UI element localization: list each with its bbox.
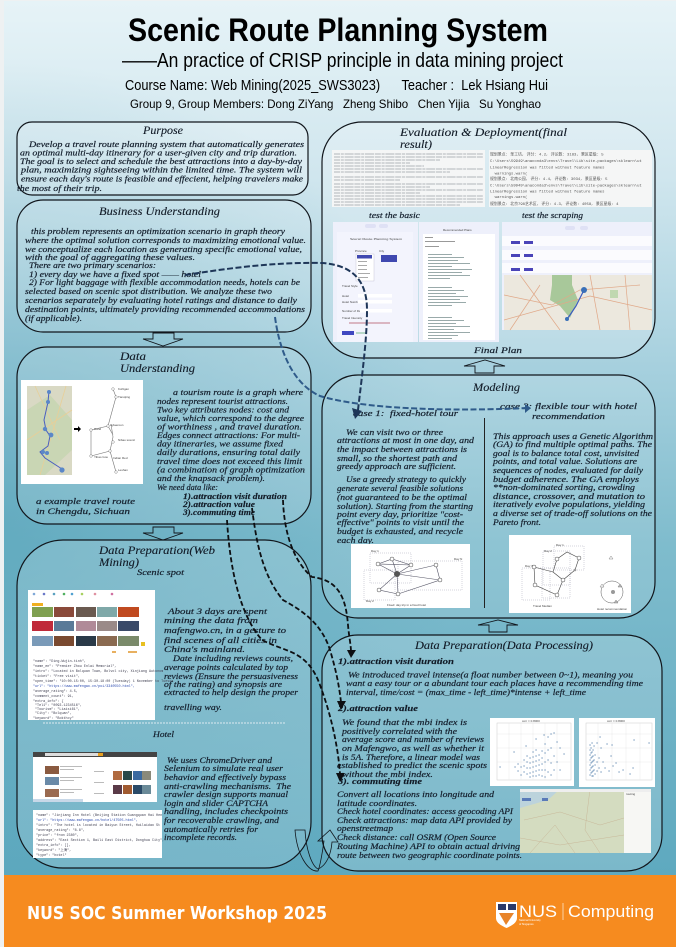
figure: scenic spot site and json: "average_rating": 4.5, <box>33 689 78 694</box>
screenshot: planner form: City <box>379 249 385 253</box>
text block: scenic spot body: Date including reviews counts, <box>172 653 293 663</box>
heading: evaluation and deployment: result) <box>400 139 432 151</box>
arrow: dashed link commuting time <box>227 520 345 782</box>
figure: scenic spot site and json: "name_en": "Premier Zhou Enlai Memorial", <box>33 664 116 669</box>
panel: modeling <box>322 375 655 618</box>
text block: scenic spot body: reviews (Ensure the persuasiveness <box>164 671 299 681</box>
text block: case 2 body: **non-dominated sorting, crowding <box>493 482 636 492</box>
text block: scenic spot body: mafengwo.cn, in a gesture to <box>164 625 287 635</box>
heading: data preparation web mining: Mining) <box>98 557 139 569</box>
subheading: attraction value: 2).attraction value <box>337 703 418 713</box>
subheading: case 2: recommendation <box>532 411 606 421</box>
text block: data understanding body: We need data like: <box>157 482 218 492</box>
figure: hotel json: "extra_info": [], <box>36 843 71 848</box>
figure: hotel json: "name": "Jinjiang Inn Hotel (Beijing Station Guangquan Hai Hen <box>36 813 162 818</box>
text block: case 1 body: We can visit two or three <box>346 427 443 437</box>
arrow: dashed link attraction value <box>252 508 346 710</box>
arrow: modeling to evaluation <box>464 360 505 373</box>
text block: case 2 body: goal is to balance total cost, unvisited <box>493 448 640 458</box>
text block: commuting time body: route between two geographic coordinate points. <box>337 850 522 860</box>
panel: data preparation data processing <box>322 635 662 871</box>
figure: route map and graph: Kohlgan <box>118 387 129 391</box>
text block: business understanding body: where the optimal solution corresponds to maximizing emotional value. <box>25 235 306 245</box>
text block: hotel body: incomplete records. <box>164 832 237 842</box>
figure: flexible tour graph: Day 2 <box>544 549 552 553</box>
text block: hotel body: Selenium to simulate real user <box>164 763 284 773</box>
text block: case 1 body <box>336 427 475 545</box>
text block: commuting time body: latitude coordinates. <box>337 798 417 808</box>
text block: business understanding body: we conceptualize each location as generating specific emotional value, <box>25 244 302 254</box>
figure: hotel json <box>33 810 164 858</box>
text block: commuting time body: openstreetmap <box>337 823 394 833</box>
text block: scenic spot body: of the rating) and synopsis are <box>164 679 282 689</box>
subheading: commuting time: 3). commuting time <box>337 776 422 786</box>
label: final plan: Final Plan <box>473 345 523 355</box>
arrow: dashed link visit duration <box>283 500 356 658</box>
footer band <box>4 875 676 947</box>
text block: scenic spot body: average points calculated by top <box>164 662 289 672</box>
caption: example route: in Chengdu, Sichuan <box>36 506 131 516</box>
figure: scenic spot site and json: "City": "Bolquan", <box>35 711 72 716</box>
figure: route map and graph: Tianqiing <box>118 395 130 399</box>
figure: route map and graph: Leshan <box>118 468 128 472</box>
caption: test the basic: test the basic <box>369 210 420 220</box>
figure: scraping log output: 规划景点: 北京798艺术区, 评分: 4.3, 评论数: 4058, 景区星级: 4 <box>490 201 619 207</box>
text block: business understanding body: with the goal of aggregating these values. <box>25 252 195 262</box>
arrow: curved data preparation to data processing <box>295 830 338 871</box>
screenshot: planner form: Scenic Route Planning System <box>350 237 403 241</box>
text block: purpose body: the most of their trip. <box>17 183 102 193</box>
figure: hotel json: "type": "hotel" <box>36 853 67 858</box>
text block: attraction value body: We found that the mbi index is <box>342 717 468 727</box>
figure: hotel json: "average_rating": "8.8", <box>36 828 85 833</box>
text block: data understanding body: (a combination of graph optimization <box>157 464 306 474</box>
text block: business understanding body: There are two primary scenarios: <box>29 260 156 270</box>
subheading: case 1: case 1: fixed-hotel tour <box>353 408 459 418</box>
figure: scraping log output: warnings.warn( <box>490 195 527 200</box>
text block: business understanding body: selected based on scenic spot distribution. We analyze these two <box>25 286 273 296</box>
figure: scraping log output: C:\Users\59949\anaconda3\envs\Travel\Lib\site-packages\sklearn\ut <box>490 184 642 188</box>
arrow: data preparation to modeling <box>478 620 518 632</box>
logo wordmark: NUS <box>519 902 557 921</box>
screenshot: recommended plans: Recommended Plans <box>443 228 472 232</box>
screenshot: planner form: Hotel Number <box>342 300 361 304</box>
text block: hotel body: behavior and effectively bypass <box>164 772 287 782</box>
text block: case 1 body: greedy approach are sufficient. <box>337 461 456 471</box>
text block: attraction value body: established to predict the scenic spots <box>337 760 488 770</box>
heading: data preparation web mining <box>98 545 215 569</box>
text block: scenic spot body: travelling way. <box>164 702 222 712</box>
text block: commuting time body: Routing Machine) API to obtain actual driving <box>336 841 521 851</box>
screenshot: scraping result map <box>502 222 652 330</box>
subheading: case 2: case 2: flexible tour with hotel <box>500 401 638 411</box>
chart: scatter of score vs mbi: corr = 0.8000 <box>522 719 540 723</box>
panel: business understanding <box>17 200 311 332</box>
text block: commuting time body: Check hotel coordinates: access geocoding API <box>337 806 514 816</box>
figure: route map and graph: Indian Red <box>113 456 128 460</box>
figure: fixed-hotel graph: Day N <box>454 557 462 561</box>
text block: hotel body: anti-crawling mechanisms. The <box>164 781 291 791</box>
heading: data understanding: Data <box>119 351 146 363</box>
figure: fixed-hotel graph: Day 1 <box>371 549 379 553</box>
panel: data preparation web mining <box>17 540 311 868</box>
text block: case 1 body: (not guaranteed to be the optimal <box>337 492 468 502</box>
text block: data understanding body: Edges connect attractions: For multi- <box>156 430 300 440</box>
figure: scenic spot site and json: "open_time": "10:00-15:00, 15:30-18:00 (Tuesday) 1 November to Tuesda <box>33 679 173 684</box>
panel: evaluation and deployment <box>322 122 655 358</box>
figure: fixed-hotel graph <box>351 544 470 608</box>
text block: attraction value body: without the mbi index. <box>342 769 433 779</box>
text block: data understanding body: 1).attraction visit duration <box>183 491 287 501</box>
screenshot: planner form <box>333 222 418 342</box>
text block: hotel body: login and slider CAPTCHA <box>164 798 269 808</box>
text block: data understanding body: daily durations, ensuring total daily <box>157 447 300 457</box>
text block: hotel body: crawler design supports manual <box>164 789 289 799</box>
title: Scenic Route Planning System <box>128 12 548 48</box>
text block: commuting time body <box>336 789 522 860</box>
text block: scenic spot body <box>164 606 299 712</box>
text block: case 1 body: the impact between attractions is <box>337 444 468 454</box>
text block: data understanding body: 3).commuting time <box>182 507 255 517</box>
group members line: Group 9, Group Members: Dong ZiYang Zheng Shibo Chen Yijia Su Yonghao <box>130 97 541 111</box>
figure: route map and graph: Rand <box>94 427 102 431</box>
text block: hotel body <box>164 755 291 842</box>
subheading: scenic spot: Scenic spot <box>137 567 185 577</box>
text block: visit duration body: We introduced travel intense(a float number between 0~1), meaning you <box>348 670 634 680</box>
heading: data understanding <box>119 351 195 375</box>
text block: attraction value body: on Mafengwo, as well as whether it <box>342 743 485 753</box>
figure: scenic spot site and json: "keyword": "Bokthcy" <box>33 716 74 721</box>
text block: business understanding body: scenarios separately by evaluating hotel ratings and distance to daily <box>25 295 297 305</box>
screenshot: planner form: Travel Intensity <box>342 316 363 320</box>
text block: visit duration body: interval, time/cost = (max_time - left_time)*intense + left_time <box>346 687 586 697</box>
text block: data understanding body: nodes represent tourist attractions. <box>157 396 288 406</box>
text block: data understanding body: travel time does not exceed this limit <box>157 456 303 466</box>
text block: attraction value body <box>337 717 488 779</box>
text block: business understanding body: 1) every day we have a fixed spot —— hotel <box>29 269 202 279</box>
panel: data understanding <box>17 347 311 524</box>
figure: scraping log output: LinearRegression was fitted without feature names <box>490 190 605 194</box>
text block: data understanding body: and the knapsack problem). <box>157 473 265 483</box>
text block: case 2 body: sequences of nodes, evaluated for daily <box>493 465 643 475</box>
figure: scenic spot site and json: "url": "https://www.mafengwo.cn/poi/3340550.html", <box>33 684 135 689</box>
chart: scatter of reviews vs mbi: corr = 0.8000 <box>607 719 625 723</box>
subheading: attraction visit duration: 1).attraction visit duration <box>338 656 454 666</box>
text block: data understanding body: value, which correspond to the degree <box>157 413 304 423</box>
text block: scenic spot body: China's mainland. <box>164 644 245 654</box>
figure: osm route map: routing <box>626 792 636 796</box>
text block: case 2 body: (GA) to find multiple optimal paths. The <box>493 439 652 449</box>
text block: hotel body: handling, includes checkpoints <box>164 806 289 816</box>
logo: NUS Computing: National University <box>519 918 541 922</box>
figure: scenic spot site and json: "Tourism": "Liaisi61", <box>35 707 80 712</box>
figure: scraping log output: LinearRegression was fitted without feature names <box>490 166 605 170</box>
text block: attraction value body: is 5A. Therefore, a linear model was <box>342 752 481 762</box>
figure: scraping log output: C:\Users\59949\anaconda3\envs\Travel\Lib\site-packages\sklearn\ut <box>490 159 642 164</box>
text block: case 2 body <box>492 431 653 527</box>
screenshot: planner form: Hotel <box>342 294 349 298</box>
figure: scenic spot site and json: "extra_info": { <box>33 699 64 704</box>
text block: business understanding body <box>25 226 306 323</box>
arrow: dashed link accommodations to case 2 <box>275 317 531 413</box>
figure: route log output <box>332 150 485 207</box>
figure: scenic spot site and json: "name": "Ding-Wujin-tinh", <box>33 659 86 664</box>
text block: commuting time body: Check attractions: map data API provided by <box>337 815 512 825</box>
caption: example route <box>36 496 135 516</box>
text block: commuting time body: Convert all locations into longitude and <box>337 789 495 799</box>
text block: data understanding body: of worthiness , and travel duration. <box>157 422 302 432</box>
figure: scraping log output: warnings.warn( <box>490 172 527 176</box>
subtitle: ——An practice of CRISP principle in data mining project <box>122 50 563 72</box>
heading: modeling: Modeling <box>472 382 520 394</box>
text block: attraction value body: positively correlated with the <box>341 726 457 736</box>
text block: attraction value body: average score and number of reviews <box>342 734 485 744</box>
figure: route map and graph <box>21 380 143 484</box>
text block: purpose body: plan, maximizing sightseeing within the limited time. The system will <box>20 164 303 174</box>
figure: flexible tour graph <box>509 535 631 613</box>
figure: flexible tour graph: Hotel recommendation <box>597 607 628 611</box>
figure: flexible tour graph: Day 1 <box>556 543 564 547</box>
text block: case 2 body: points, and total value. Solutions are <box>492 456 637 466</box>
text block: case 1 body: point every day, prioritize "cost- <box>336 509 463 519</box>
figure: flexible tour graph: Day 3 <box>525 564 533 568</box>
text block: business understanding body: destination points, ultimately providing recommended accommodations <box>25 304 306 314</box>
text block: case 2 body: Pareto front. <box>492 517 541 527</box>
text block: scenic spot body: About 3 days are spent <box>167 606 268 616</box>
figure: route map and graph: Aylaeroon <box>110 423 124 427</box>
arrow: data understanding to data preparation <box>143 527 183 540</box>
logo: NUS Computing: Computing <box>568 902 654 921</box>
text block: case 1 body: Use a greedy strategy to quickly <box>346 474 466 484</box>
caption: example route: a example travel route <box>36 496 135 506</box>
text block: case 1 body: attractions at most in one day, and <box>337 435 475 445</box>
arrow: business to data understanding <box>143 333 183 346</box>
figure: flexible tour graph: Travel Median <box>533 604 552 608</box>
text block: business understanding body: 2) For light baggage with flexible accommodation needs, hotels can be <box>29 277 300 287</box>
figure: fixed-hotel graph: Day 2 <box>366 599 374 603</box>
text block: case 1 body: generate several feasible solutions <box>337 483 464 493</box>
heading: data preparation data processing: Data Preparation(Data Processing) <box>414 640 593 652</box>
text block: case 2 body: This approach uses a Genetic Algorithm <box>493 431 653 441</box>
text block: hotel body: automatically retries for <box>164 824 259 834</box>
text block: purpose body: The goal is to select and schedule the best attractions into a day-by-day <box>20 156 302 166</box>
logo: NUS Computing <box>496 902 654 928</box>
footer title: NUS SOC Summer Workshop 2025 <box>27 904 327 924</box>
logo: NUS Computing: of Singapore <box>519 922 534 926</box>
text block: data understanding body: a tourism route is a graph where <box>173 387 303 397</box>
screenshot: recommended plans <box>419 222 499 342</box>
text block: purpose body: Develop a travel route planning system that automatically generates <box>28 139 305 149</box>
heading: business understanding: Business Understanding <box>99 206 220 218</box>
figure: scenic spot site and json: "intro": "Located in Bolquan Town, Bolvol city, Xinjiang Autonom <box>33 669 163 674</box>
text block: hotel body: We uses ChromeDriver and <box>167 755 273 765</box>
text block: visit duration body: want a easy tour or a abundant tour each places have a recommending time <box>346 678 643 688</box>
figure: hotel json: "keyword": "上海", <box>36 847 71 853</box>
text block: commuting time body: Check distance: call OSRM (Open Source <box>337 832 496 842</box>
text block: scenic spot body: extracted to help design the proper <box>164 687 299 697</box>
figure: route map and graph: Nibao scenic <box>118 438 136 442</box>
figure: hotel json: "url": "https://www.mafengwo.cn/hotel/47505.html", <box>36 818 138 823</box>
figure: fixed-hotel graph: Fixed: day trip in a fixed hotel <box>387 603 426 607</box>
text block: case 1 body: solution). Starting from the starting <box>337 501 474 511</box>
figure: scraping log output <box>489 150 652 207</box>
figure: scraping log output: 规划景点: 北南公园, 评分: 4.4, 评论数: 3034, 景区星级: 5 <box>490 176 608 182</box>
text block: scenic spot body: find scenes of all cities in <box>164 635 278 645</box>
course and teacher line: Course Name: Web Mining(2025_SWS3023) Teacher : Lek Hsiang Hui <box>125 78 548 94</box>
chart: scatter of score vs mbi <box>490 718 574 786</box>
text block: case 1 body: small, so the shortest path and <box>337 453 458 463</box>
figure: hotel json: "address": "East Section 1, Baili East District, Donghua City", <box>36 838 164 843</box>
figure: scenic spot site and json: "Tel1": "0093-1234516", <box>35 703 82 708</box>
chart: scatter of reviews vs mbi <box>579 718 655 787</box>
text block: case 1 body: effective" points to visit until the <box>337 517 464 527</box>
text block: purpose body: ensure each day's route is feasible and effecient, helping travelers make <box>21 174 303 184</box>
caption: test the scraping: test the scraping <box>522 210 584 220</box>
text block: data understanding body: 2).attraction value <box>182 499 255 509</box>
text block: scenic spot body: mining the data from <box>164 615 258 625</box>
heading: data understanding: Understanding <box>120 363 195 375</box>
text block: purpose body: an optimal multi-day itinerary for a user-given city and trip duration. <box>20 148 297 158</box>
text block: case 1 body: each day. <box>337 535 374 545</box>
heading: evaluation and deployment: Evaluation & Deployment(final <box>399 127 567 139</box>
heading: evaluation and deployment <box>399 127 567 151</box>
figure: hotel site screenshot <box>33 752 157 802</box>
screenshot: planner form: Province <box>355 249 367 253</box>
arrow: dashed link hotel to case 1 <box>185 263 367 419</box>
text block: case 2 body: distance, crossover, and mutation to <box>493 491 646 501</box>
screenshot: planner form: Travel Style <box>342 284 358 288</box>
subheading: case 2 <box>500 401 638 421</box>
text block: case 1 body: budget is exhausted, and recycle <box>337 526 463 536</box>
figure: hotel json: "intro": "The hotel is located in Baiyun Street, Huilaidao St <box>36 823 160 828</box>
figure: scenic spot site and json: "comment_count": 91, <box>33 694 74 699</box>
figure: scraping log output: 规划景点: 圣工坊, 评分: 4.2, 评论数: 3183, 景区星级: 5 <box>490 152 604 158</box>
text block: business understanding body: (if applicable). <box>25 313 82 323</box>
figure: scenic spot site and json <box>28 590 173 721</box>
figure: hotel json: "price": "from 2380", <box>36 833 79 838</box>
text block: visit duration body <box>346 670 643 697</box>
panel: purpose <box>17 122 308 195</box>
text block: hotel body: for recoverable crawling, and <box>164 815 280 825</box>
heading: data preparation web mining: Data Preparation(Web <box>98 545 215 557</box>
text block: purpose body <box>17 139 305 193</box>
text block: data understanding body <box>156 387 306 517</box>
text block: case 2 body: budget adherence. The GA employs <box>493 474 640 484</box>
text block: case 2 body: iteratively evolve populations, yielding <box>493 499 646 509</box>
subheading: hotel: Hotel <box>152 729 175 739</box>
text block: case 2 body: a diverse set of trade-off solutions on the <box>493 508 652 518</box>
text block: data understanding body: Two key attributes nodes: cost and <box>157 404 290 414</box>
text block: business understanding body: this problem represents an optimization scenario in graph theory <box>31 226 285 236</box>
figure: scenic spot site and json: "ticket": "Free visit", <box>33 674 80 679</box>
figure: route map and graph: Yibao Gou <box>94 455 108 459</box>
heading: purpose: Purpose <box>142 125 183 137</box>
screenshot: planner form: Number of Days <box>342 309 364 313</box>
text block: data understanding body: day itineraries, we assume fixed <box>157 438 284 448</box>
figure: osm route map <box>520 789 651 853</box>
